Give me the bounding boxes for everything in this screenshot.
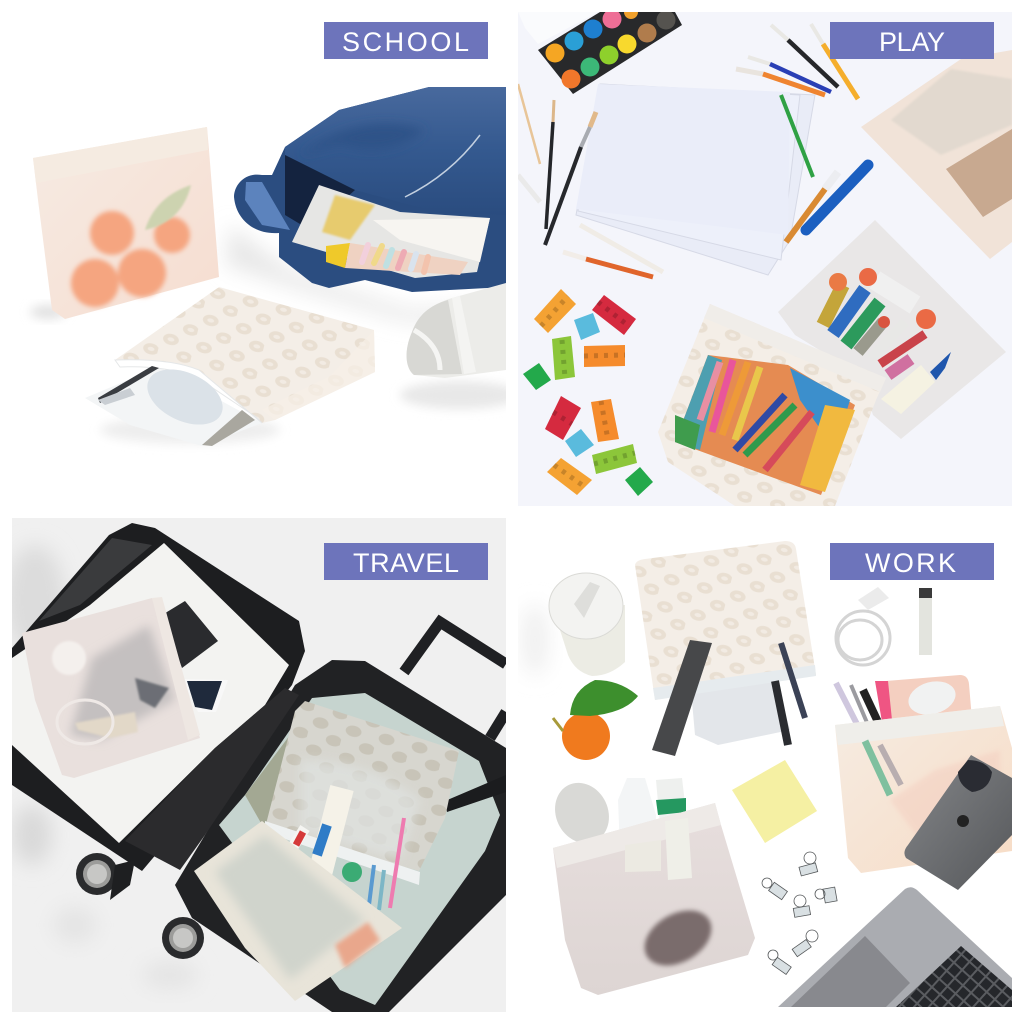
label: play [830,22,994,59]
sticky note [732,760,817,843]
suitcase handle [404,622,506,738]
binder clips [762,852,837,974]
brushes and markers [518,24,868,277]
phone [162,601,218,668]
leopard bag with toiletries [265,701,459,910]
toy bricks [523,289,653,496]
white bottle [407,283,506,378]
suitcase base [125,660,506,1012]
panel: travel [5,518,506,1012]
leopard bag with crayons [658,304,886,506]
laptop [778,887,1012,1007]
wheels [76,853,204,959]
bag inside backpack [292,185,490,278]
frosted bag with toiletries [545,774,755,995]
panel: school [30,87,506,446]
sunglasses [187,681,222,710]
leopard bag with tools [635,541,816,756]
label: school: SCHOOL [342,27,469,57]
orange with leaf [553,680,638,760]
towel [12,543,289,843]
suitcase lid [12,523,305,871]
panel: work [518,518,1012,1012]
clear bag with art supplies [778,220,1006,439]
mouse pad and pens [834,675,971,723]
frosted bag top right [861,50,1012,259]
blue backpack [234,87,506,292]
frosted bag with oranges [33,127,219,319]
label: play: PLAY [879,27,945,57]
charger cable [836,587,890,665]
label: school [324,22,488,59]
label: travel: TRAVEL [353,548,459,578]
label: work [830,543,994,580]
watercolor palette [538,12,682,94]
glue bottle [881,352,951,414]
keychain tag [919,588,932,655]
coffee tumbler [549,573,625,676]
frosted bag on towel [22,597,200,778]
phone [904,755,1012,890]
leopard print bag with stationery [85,287,375,446]
paper stack [576,84,815,275]
panel: play [518,5,1012,506]
frosted peach bag [835,706,1012,873]
large frosted bag [194,821,402,1001]
label: work: WORK [865,548,956,578]
label: travel [324,543,488,580]
